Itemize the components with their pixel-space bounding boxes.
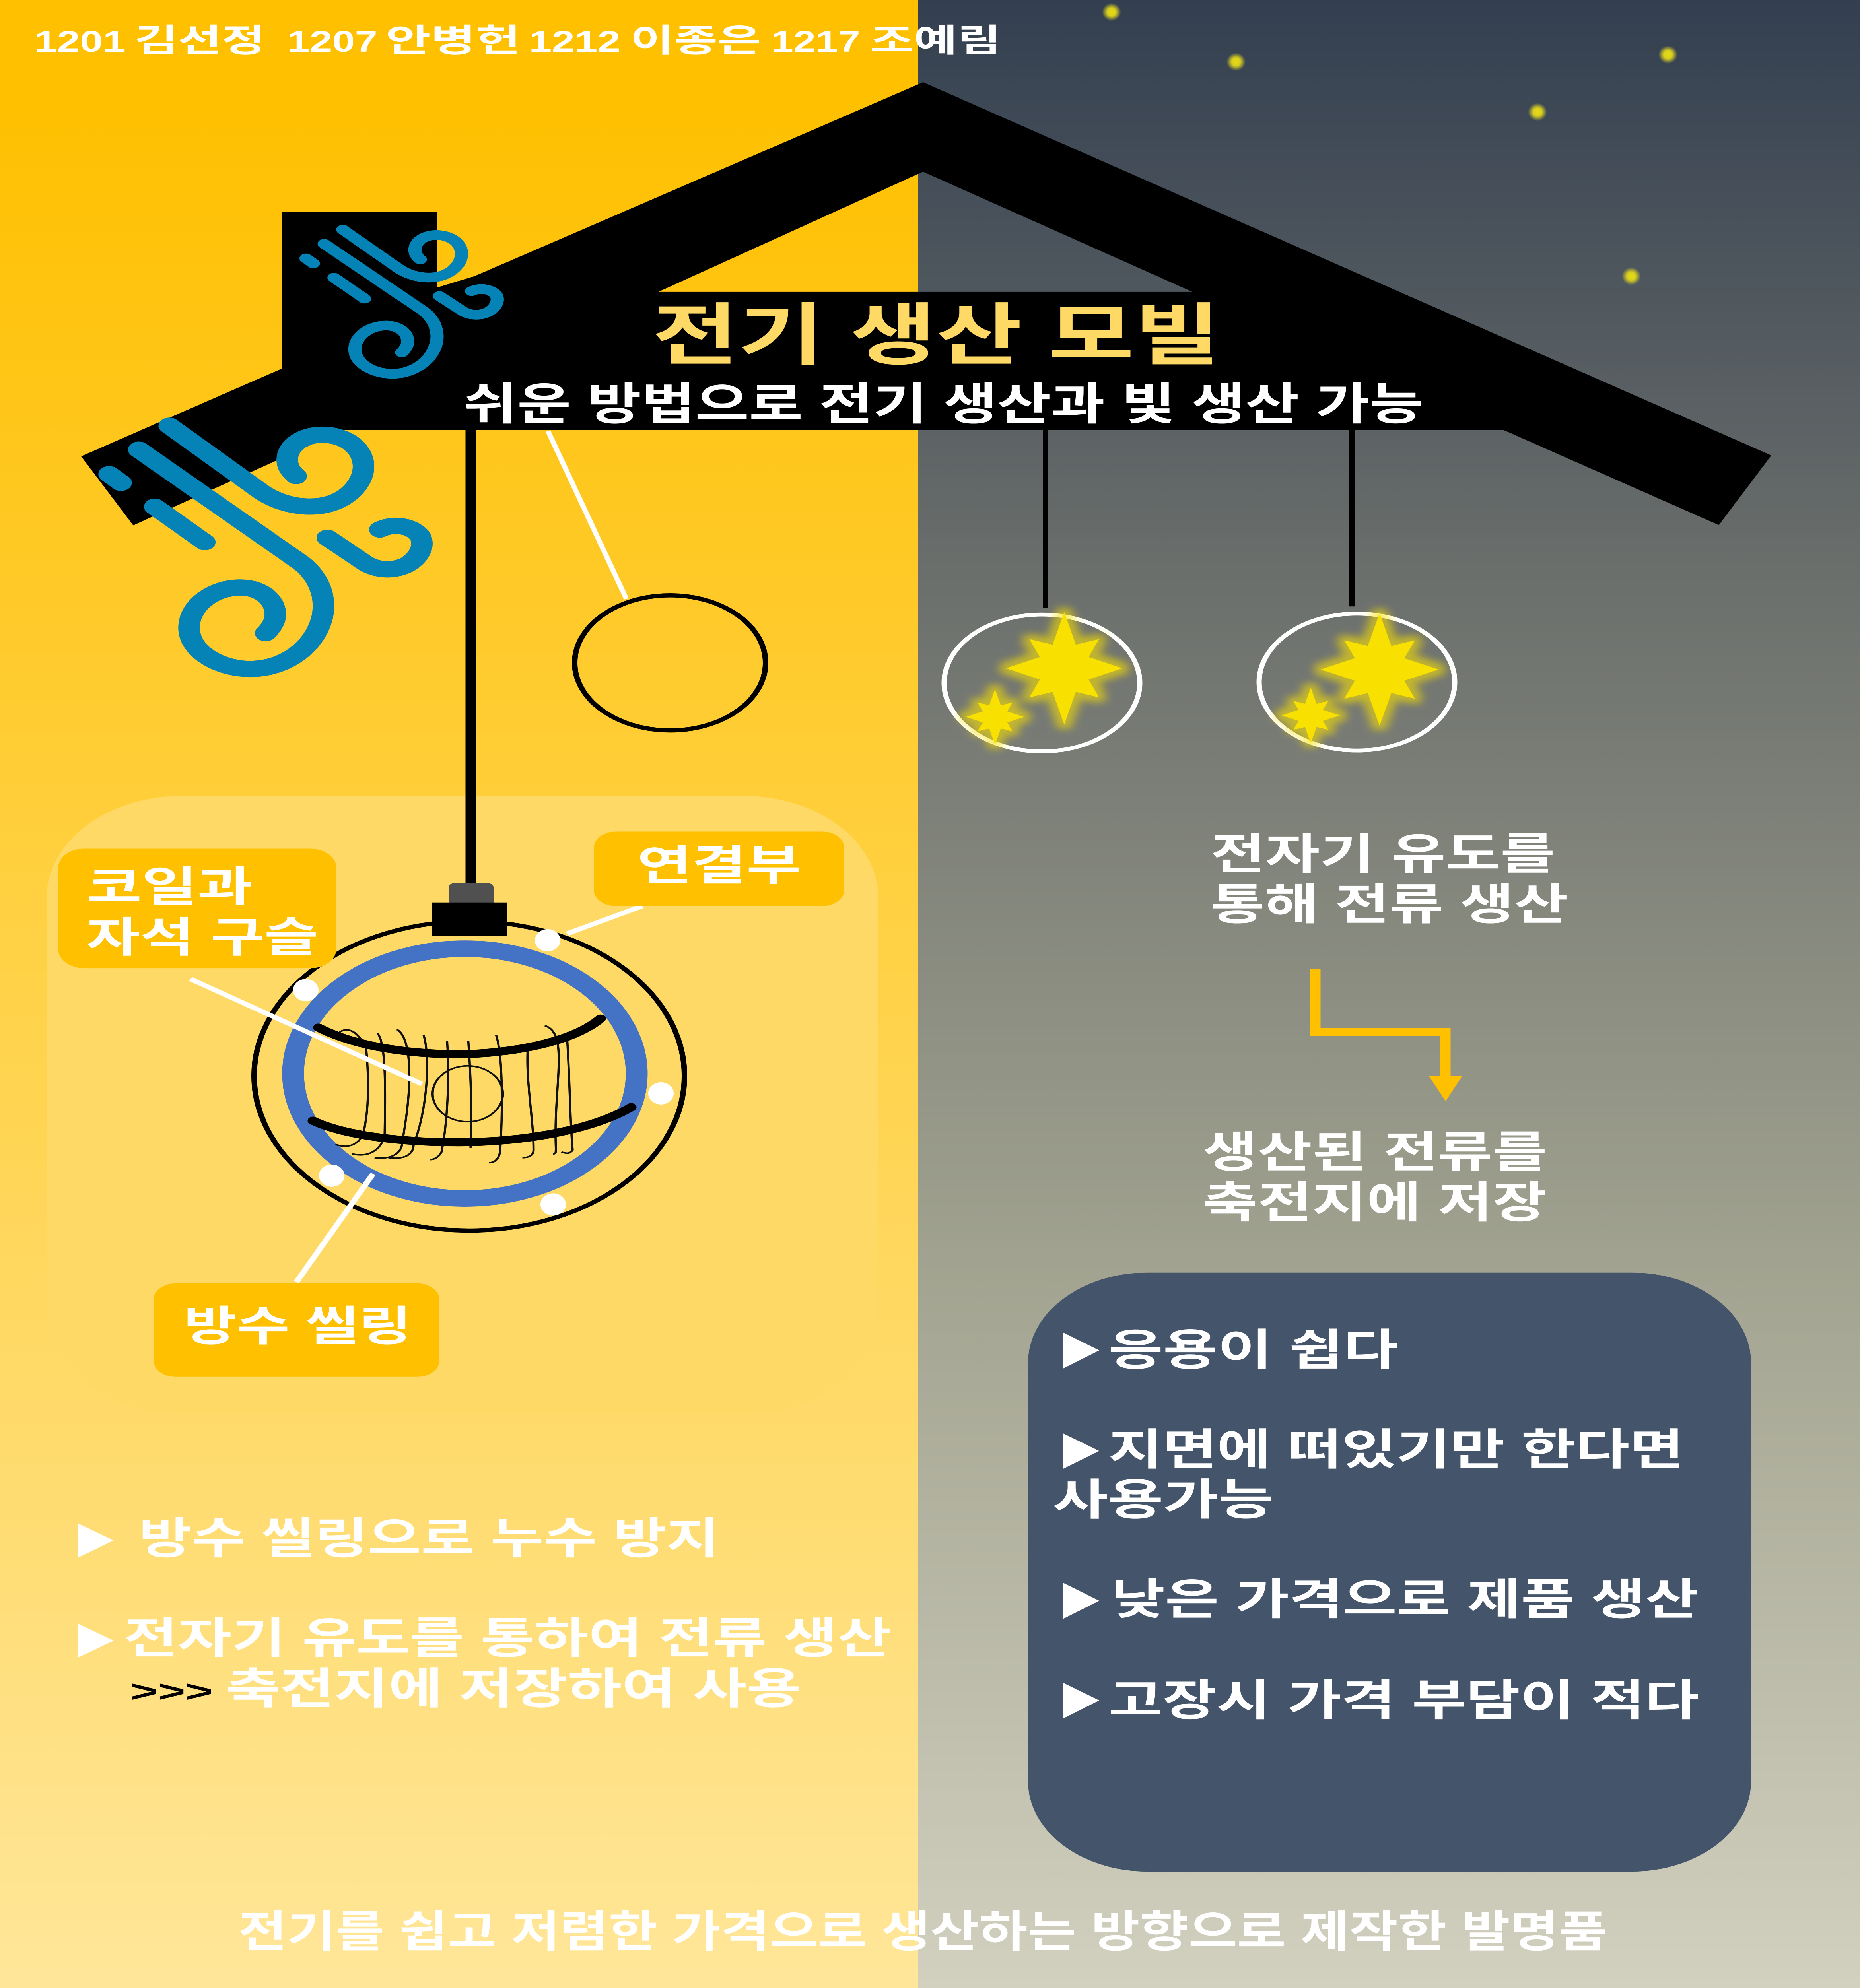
icon: wind on roof end [109,426,422,669]
storage line: 축전지에 저장하여 사용 [226,1653,801,1716]
panel: advantages [1028,1273,1751,1872]
text: store current in battery [1203,1117,1547,1230]
night sky stars [1102,3,1677,285]
credits line: 1201 [34,25,126,58]
subtitle: 쉬운 방법으로 전기 생산과 빛 생산 가능 [463,368,1423,433]
callout: waterproof sealing [154,1283,439,1377]
callout: connector: 연결부 [637,831,801,893]
callout: coil and magnet sphere: 자석 구슬 [86,903,318,964]
callout leader lines [190,906,642,1282]
text: induction generates current: 전자기 유도를 [1211,819,1555,881]
white sealing dots [293,929,674,1215]
advantage: usable floating above ground: 지면에 떠있기만 한다면 [1108,1414,1684,1477]
callout: waterproof sealing: 방수 씰링 [184,1292,412,1353]
advantage: low price: 낮은 가격으로 제품 생산 [1111,1564,1699,1627]
title: 전기 생산 모빌 [652,281,1220,379]
credits line: 김선정 [134,14,265,61]
credits line: 1207 [287,25,377,58]
credits line: 조예림 [870,14,1001,61]
credits line: 1212 [529,25,620,58]
background: daytime left half [0,0,918,1988]
magnet supports [313,1019,631,1142]
hanging strings and roof attachments [471,426,1352,884]
icon: wind on chimney [306,230,497,374]
roof with chimney and title banner [81,82,1771,525]
text block: left bullets [78,1503,891,1716]
waterproof sealing ring [293,949,637,1198]
credits line: 이종은 [630,14,761,61]
text: induction generates current [1211,819,1568,932]
ornament: glowing stars, left [944,612,1140,751]
advantage: usable floating above ground: 사용가능 [1053,1464,1274,1528]
credits line: 1217 [771,25,860,58]
background: night right half [918,0,1860,1988]
advantage: easy to apply: 응용이 쉽다 [1108,1314,1398,1378]
callout: coil and magnet sphere [58,849,336,968]
ornament: glowing stars, right [1259,613,1455,751]
empty ornament circle [575,595,766,730]
black chevrons: >>> [130,1674,213,1708]
advantage: usable floating above ground [1053,1414,1684,1528]
text: store current in battery: 생산된 전류를 [1203,1117,1547,1180]
callout: connector [594,831,844,906]
advantage: low repair burden: 고장시 가격 부담이 적다 [1108,1665,1699,1728]
arrow: flow to battery [1315,969,1462,1101]
callout: coil and magnet sphere: 코일과 [86,853,253,914]
bullet: induction: 전자기 유도를 통하여 전류 생산 [124,1603,891,1666]
credits line [34,14,1001,61]
sphere outer shell [254,921,684,1231]
coil windings [336,1026,573,1163]
text: store current in battery: 축전지에 저장 [1203,1167,1547,1230]
credits line: 안병헌 [386,14,521,61]
bullet: waterproof: 방수 씰링으로 누수 방지 [139,1503,719,1566]
text: induction generates current: 통해 전류 생산 [1211,869,1568,932]
connector cap [432,883,507,936]
pale panel behind the mobile diagram [47,796,878,1414]
footer statement: 전기를 쉽고 저렴한 가격으로 생산하는 방향으로 제작한 발명품 [238,1897,1607,1959]
diagram: mobile sphere cross-section [190,883,684,1282]
